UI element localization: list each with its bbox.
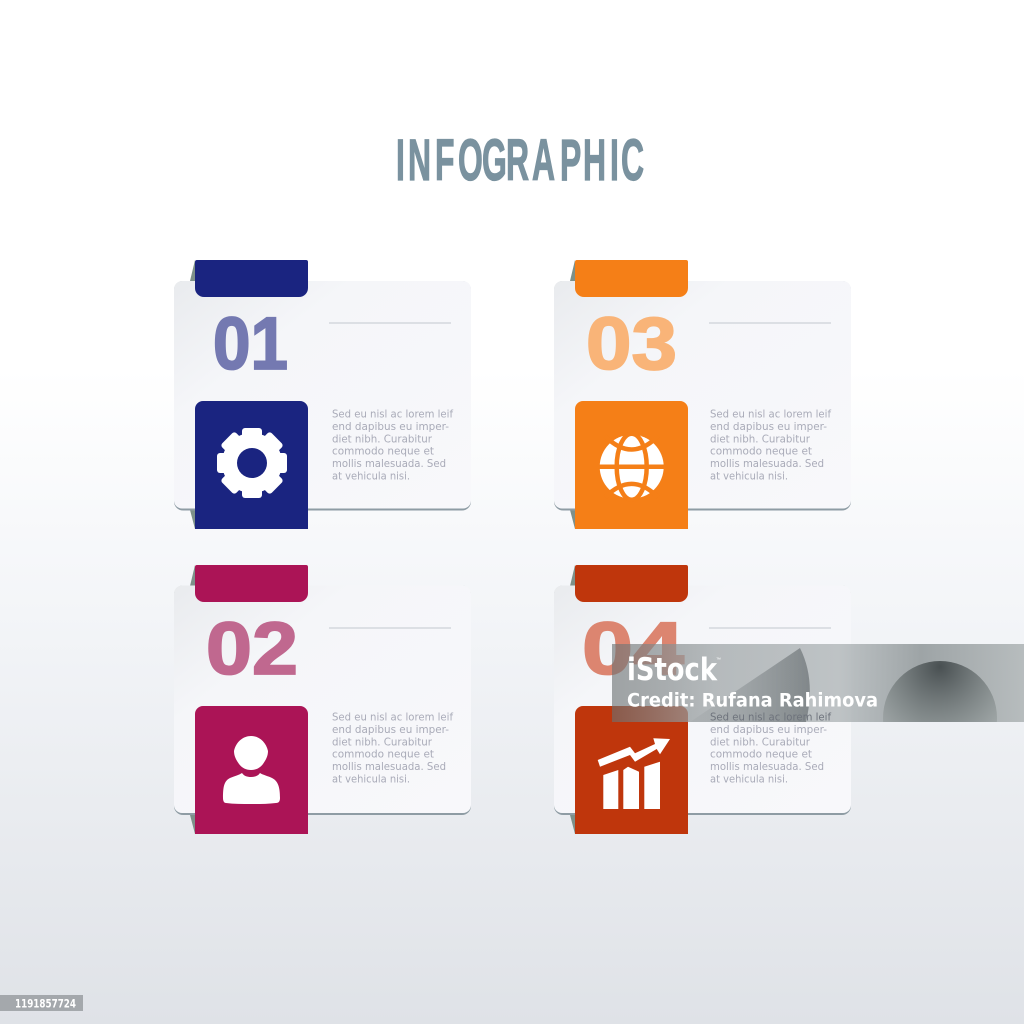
divider <box>329 627 451 629</box>
description: at vehicula nisi. <box>710 774 788 785</box>
description: mollis malesuada. Sed <box>710 762 824 773</box>
watermark credit: Credit: Rufana Rahimova <box>627 690 878 712</box>
tab <box>195 260 308 297</box>
description: Sed eu nisl ac lorem leif <box>710 410 831 421</box>
image id label <box>0 995 83 1011</box>
trademark mark: ™ <box>716 657 721 663</box>
description: Sed eu nisl ac lorem leif <box>332 713 453 724</box>
description: Sed eu nisl ac lorem leif <box>332 410 453 421</box>
divider <box>329 322 451 324</box>
description: commodo neque et <box>332 750 434 761</box>
card <box>174 586 471 815</box>
panel: step 04 <box>554 565 851 834</box>
panel: step 02 <box>174 565 471 834</box>
description <box>710 410 831 482</box>
title: INFOGRAPHIC <box>396 128 644 192</box>
card <box>554 281 851 510</box>
description: end dapibus eu imper- <box>710 422 827 433</box>
description: at vehicula nisi. <box>710 471 788 482</box>
panel: step 01 <box>174 260 471 529</box>
number: 01 <box>213 302 288 385</box>
description: end dapibus eu imper- <box>332 725 449 736</box>
watermark logo: iStock <box>627 652 718 688</box>
description: mollis malesuada. Sed <box>710 459 824 470</box>
number: 02 <box>206 607 298 690</box>
number: 03 <box>586 302 677 385</box>
watermark shapes <box>703 648 810 722</box>
description: commodo neque et <box>710 750 812 761</box>
description: at vehicula nisi. <box>332 471 410 482</box>
divider <box>709 322 831 324</box>
card <box>174 281 471 510</box>
description: mollis malesuada. Sed <box>332 762 446 773</box>
description <box>332 713 453 785</box>
tab <box>195 565 308 602</box>
tab <box>575 260 688 297</box>
description: diet nibh. Curabitur <box>710 434 811 445</box>
description: end dapibus eu imper- <box>332 422 449 433</box>
icon tile: person <box>195 706 308 834</box>
icon tile: growth chart <box>575 706 688 834</box>
description <box>332 410 453 482</box>
fold shadows <box>570 260 575 529</box>
card <box>554 586 851 815</box>
description: end dapibus eu imper- <box>710 725 827 736</box>
description: diet nibh. Curabitur <box>332 737 433 748</box>
description: diet nibh. Curabitur <box>332 434 433 445</box>
description: at vehicula nisi. <box>332 774 410 785</box>
number: 04 <box>582 607 684 690</box>
description: mollis malesuada. Sed <box>332 459 446 470</box>
divider <box>709 627 831 629</box>
panel: step 03 <box>554 260 851 529</box>
description: commodo neque et <box>710 447 812 458</box>
description: commodo neque et <box>332 447 434 458</box>
description <box>710 725 827 785</box>
fold shadows <box>190 260 195 529</box>
fold shadows <box>570 565 575 834</box>
first text line of step 04 seen through the banner: Sed eu nisl ac lorem leif <box>710 713 831 724</box>
icon tile: gear <box>195 401 308 529</box>
fold shadows <box>190 565 195 834</box>
watermark banner <box>612 644 1024 722</box>
icon tile: globe <box>575 401 688 529</box>
tab <box>575 565 688 602</box>
description: diet nibh. Curabitur <box>710 737 811 748</box>
image id label: 1191857724 <box>15 996 76 1010</box>
